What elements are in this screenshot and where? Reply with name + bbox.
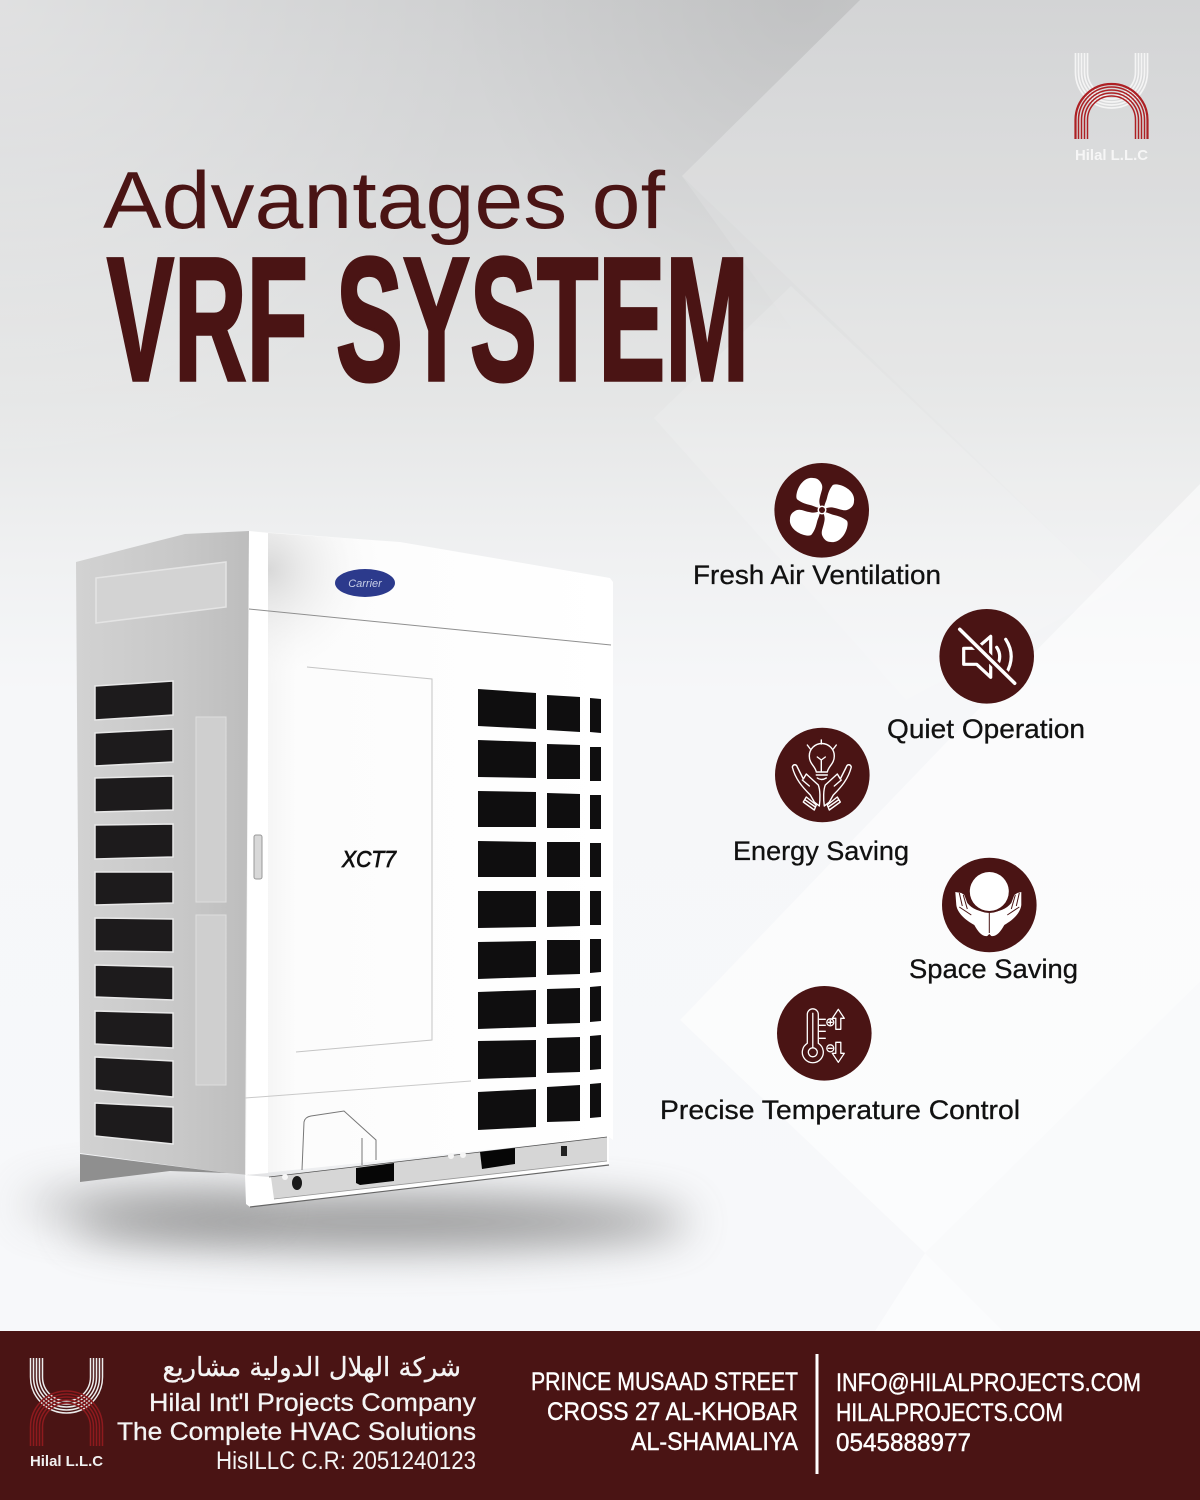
icon: bulb in hands [792, 740, 851, 810]
panel seams [245, 609, 611, 1170]
feature: Energy Saving [733, 728, 909, 866]
brand badge: Carrier [348, 578, 383, 590]
corner highlight [246, 531, 268, 1175]
icon: muted speaker [960, 629, 1015, 683]
footer logo [30, 1358, 103, 1470]
model label: XCT7 [341, 846, 397, 872]
unit floor shadow [20, 1185, 690, 1248]
contact block: INFO@HILALPROJECTS.COM [836, 1369, 1141, 1397]
company name block: Hilal Int'l Projects Company [149, 1389, 477, 1417]
icon: fan [790, 478, 854, 542]
icon: thermometer with arrows [802, 1009, 844, 1063]
feature: Energy Saving: Energy Saving [733, 836, 909, 866]
feature: Space Saving [909, 858, 1078, 984]
side vents [95, 681, 173, 1144]
logo: top right [1075, 53, 1148, 164]
company name block: The Complete HVAC Solutions [117, 1418, 476, 1446]
underside wedge [80, 1154, 227, 1182]
contact block: 0545888977 [836, 1429, 971, 1457]
footer band [0, 1331, 1200, 1500]
feature: Precise Temperature Control [660, 986, 1020, 1125]
feature: Precise Temperature Control: Precise Temperature Control [660, 1095, 1020, 1125]
front vents [478, 689, 601, 1130]
brand badge [335, 569, 395, 597]
contact block: HILALPROJECTS.COM [836, 1399, 1063, 1427]
base tray [245, 1137, 609, 1207]
footer divider [816, 1354, 818, 1474]
address block: PRINCE MUSAAD STREET [531, 1368, 798, 1396]
side panel [76, 531, 249, 1175]
logo: top right: Hilal L.L.C [1075, 147, 1148, 164]
company name block [117, 1353, 477, 1475]
VRF outdoor unit [76, 531, 613, 1207]
footer logo: Hilal L.L.C [30, 1453, 103, 1470]
feature: Space Saving: Space Saving [909, 954, 1078, 984]
address block: AL-SHAMALIYA [631, 1428, 798, 1456]
address block [531, 1368, 798, 1456]
icon: hands holding sphere [955, 870, 1021, 936]
side long bars [196, 717, 226, 1085]
feature: Quiet Operation [887, 609, 1085, 744]
title: Advantages of: Advantages of [103, 156, 666, 246]
address block: CROSS 27 AL-KHOBAR [547, 1398, 798, 1426]
company name block: شركة الهلال الدولية مشاريع [162, 1353, 461, 1383]
feature: Fresh Air Ventilation [693, 463, 941, 590]
company name block: HisILLC C.R: 2051240123 [216, 1447, 476, 1475]
handle [254, 835, 262, 879]
front panel [245, 531, 613, 1175]
contact block [836, 1369, 1141, 1457]
feature: Fresh Air Ventilation: Fresh Air Ventilation [693, 560, 941, 590]
title: VRF SYSTEM: VRF SYSTEM [107, 222, 749, 418]
feature: Quiet Operation: Quiet Operation [887, 714, 1085, 744]
side top vent panel [96, 562, 226, 623]
